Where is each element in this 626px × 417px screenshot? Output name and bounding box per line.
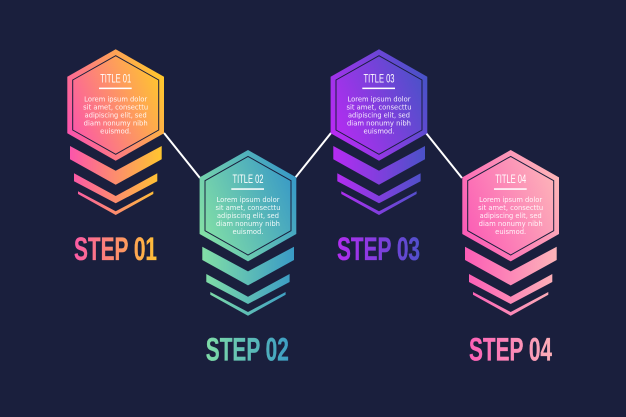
- body text 01: adipiscing elit, sed: [85, 112, 147, 120]
- title underline 04: [494, 188, 527, 190]
- chevrons 02: [202, 247, 294, 316]
- body text 03: diam nonumy nibh: [347, 120, 411, 128]
- body text 04: diam nonumy nibh: [479, 220, 543, 228]
- connector lines: [164, 133, 462, 178]
- hexagon outline 01: [73, 56, 159, 154]
- title 03: TITLE 03: [363, 71, 395, 85]
- body text 03: euismod.: [363, 128, 394, 136]
- body text 01: [83, 96, 148, 136]
- title 01: TITLE 01: [100, 71, 131, 85]
- hexagon 03: [331, 49, 427, 161]
- hexagon outline 03: [336, 56, 422, 154]
- chevrons 03: [333, 146, 425, 215]
- hexagon 01: [67, 49, 164, 161]
- step 01: [67, 49, 164, 267]
- body text 04: [478, 196, 543, 236]
- body text 03: adipiscing elit, sed: [348, 112, 410, 120]
- body text 04: Lorem ipsum dolor: [479, 196, 542, 204]
- step label 04: STEP 04: [469, 332, 552, 368]
- step 04: [462, 150, 559, 368]
- body text 01: diam nonumy nibh: [84, 120, 148, 128]
- body text 02: adipiscing elit, sed: [217, 212, 279, 220]
- body text 03: [346, 96, 412, 136]
- body text 02: [216, 196, 280, 236]
- title 04: TITLE 04: [495, 172, 526, 186]
- body text 03: Lorem ipsum dolor: [347, 96, 411, 104]
- body text 03: sit amet, consecttu: [346, 104, 411, 112]
- title underline 02: [231, 188, 264, 190]
- body text 02: diam nonumy nibh: [216, 220, 280, 228]
- title underline 03: [362, 88, 395, 89]
- hexagon 04: [462, 150, 559, 261]
- title 02: TITLE 02: [232, 172, 264, 186]
- body text 04: euismod.: [495, 228, 526, 236]
- body text 01: sit amet, consecttu: [83, 104, 148, 112]
- step 03: [331, 49, 427, 267]
- hexagon 02: [200, 150, 296, 261]
- body text 02: euismod.: [232, 228, 264, 236]
- body text 01: euismod.: [100, 128, 131, 136]
- body text 04: sit amet, consecttu: [478, 204, 543, 212]
- body text 02: sit amet, consecttu: [216, 204, 280, 212]
- step 02: [200, 150, 296, 368]
- title underline 01: [99, 88, 132, 89]
- body text 04: adipiscing elit, sed: [480, 212, 542, 220]
- hexagon outline 02: [205, 156, 291, 255]
- body text 02: Lorem ipsum dolor: [216, 196, 280, 204]
- step label 03: STEP 03: [337, 231, 420, 267]
- step label 01: STEP 01: [74, 231, 157, 267]
- chevrons 01: [70, 146, 162, 215]
- step label 02: STEP 02: [206, 332, 289, 368]
- hexagon outline 04: [468, 156, 554, 255]
- body text 01: Lorem ipsum dolor: [84, 96, 147, 104]
- chevrons 04: [465, 247, 557, 316]
